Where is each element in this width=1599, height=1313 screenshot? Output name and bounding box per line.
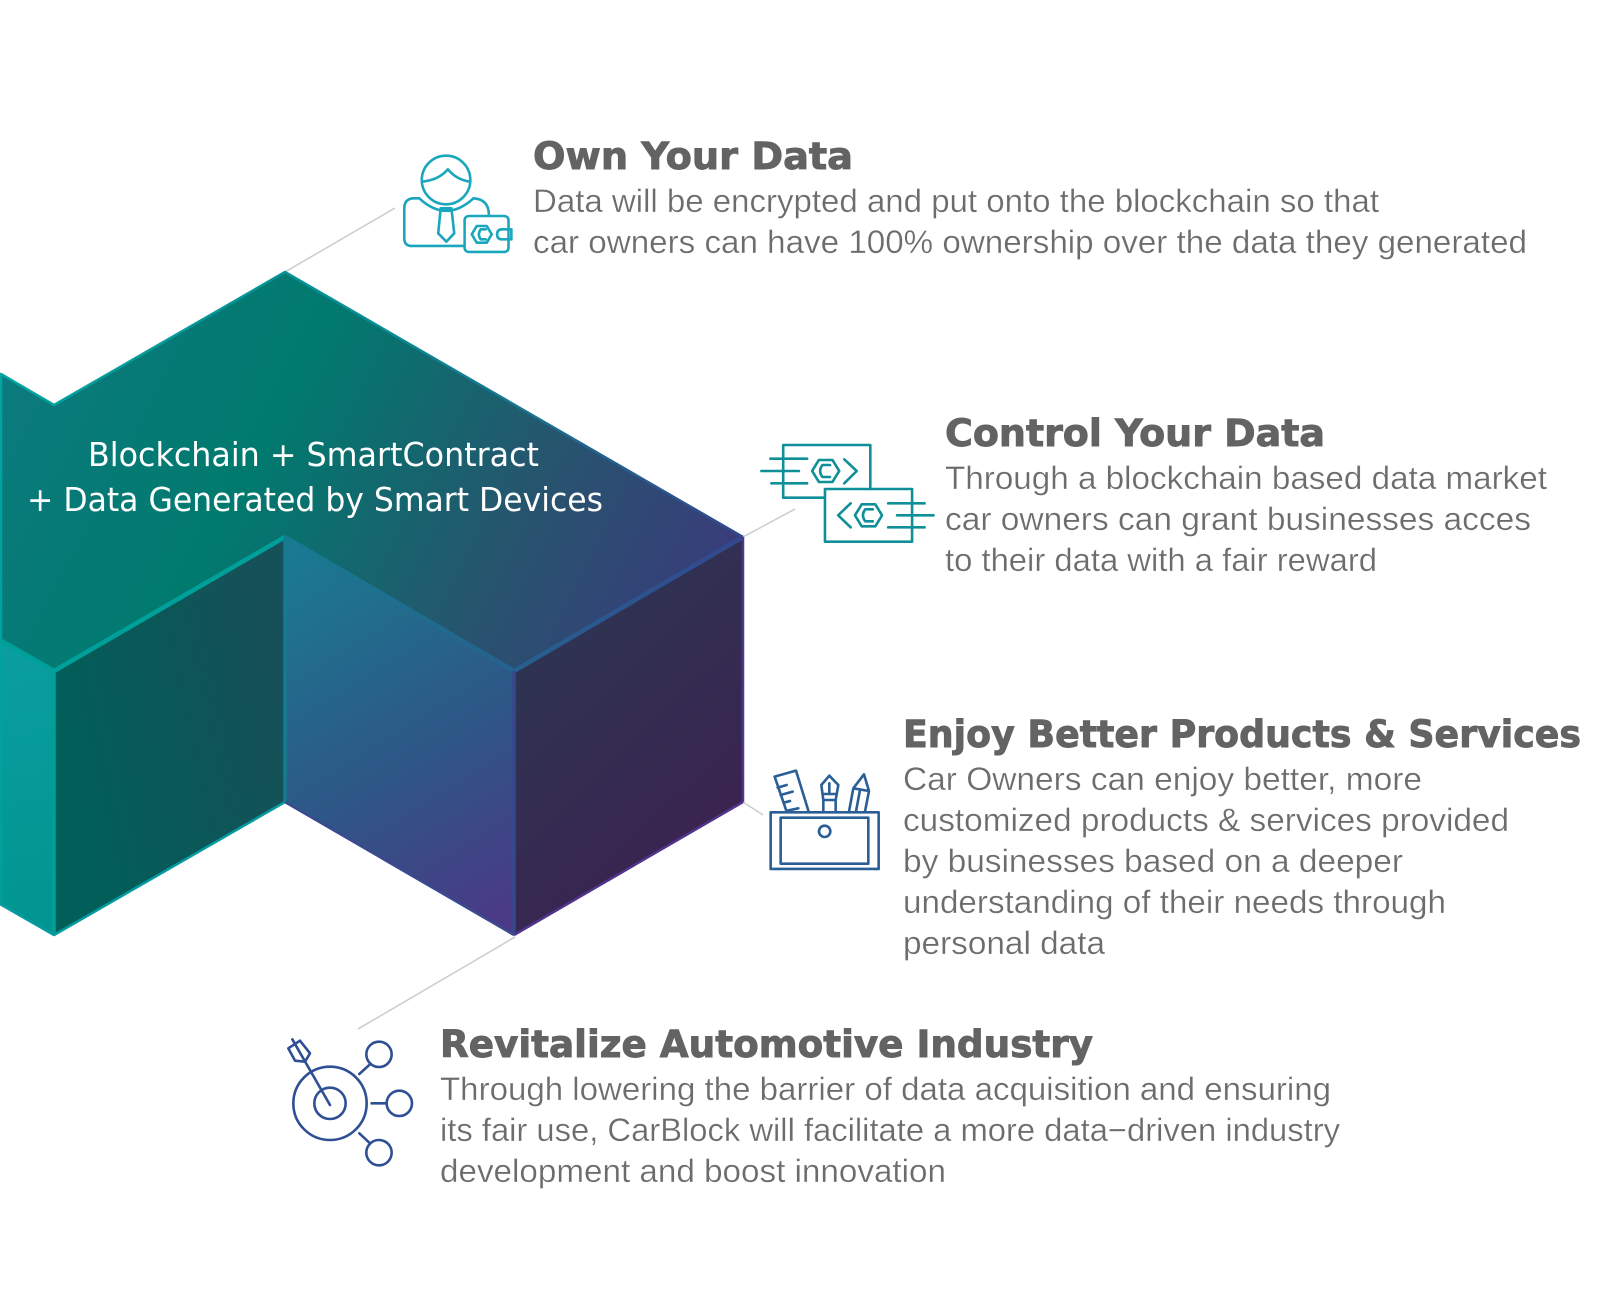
connector lines	[285, 208, 795, 1029]
text: enjoy better body: personal data	[903, 925, 1106, 961]
icon: tool box with ruler and pens	[771, 771, 879, 869]
text: own your data body: car owners can have 100% ownership over the data they generated	[533, 224, 1527, 260]
block caption: Blockchain + SmartContract	[88, 435, 539, 474]
text: enjoy better body: understanding of their needs through	[903, 884, 1446, 920]
isometric block	[0, 272, 743, 935]
panel: control your data	[761, 412, 1547, 578]
text: revitalize body	[440, 1071, 1341, 1189]
text: own your data body	[533, 183, 1527, 260]
icon: data exchange cards	[761, 445, 933, 542]
text: enjoy better body: by businesses based on a deeper	[903, 843, 1403, 879]
text: control your data body: car owners can grant businesses acces	[945, 501, 1531, 537]
heading: control your data: Control Your Data	[945, 412, 1325, 455]
icon: owner with wallet	[404, 156, 511, 252]
panel: revitalize automotive industry	[288, 1023, 1341, 1189]
text: revitalize body: development and boost innovation	[440, 1153, 946, 1189]
block caption: + Data Generated by Smart Devices	[27, 480, 603, 519]
text: control your data body: Through a blockchain based data market	[945, 460, 1547, 496]
text: control your data body: to their data with a fair reward	[945, 542, 1377, 578]
block top face	[0, 272, 743, 671]
block middle face	[285, 537, 514, 935]
heading: revitalize automotive industry: Revitalize Automotive Industry	[440, 1023, 1093, 1066]
icon: target with arrow and nodes	[288, 1039, 412, 1165]
text: enjoy better body: customized products & services provided	[903, 802, 1509, 838]
panel: enjoy better products and services	[771, 713, 1581, 961]
text: control your data body	[945, 460, 1547, 578]
text: revitalize body: Through lowering the barrier of data acquisition and ensuring	[440, 1071, 1331, 1107]
text: own your data body: Data will be encrypted and put onto the blockchain so that	[533, 183, 1379, 219]
text: enjoy better body	[903, 761, 1509, 961]
panel: own your data	[404, 135, 1527, 260]
heading: own your data: Own Your Data	[533, 135, 853, 178]
text: revitalize body: its fair use, CarBlock will facilitate a more data−driven industry	[440, 1112, 1341, 1148]
block dark inner face	[54, 537, 285, 935]
block left sliver face	[0, 640, 54, 935]
heading: enjoy better products and services: Enjoy Better Products & Services	[903, 713, 1581, 756]
block edges	[0, 272, 743, 935]
block right face	[514, 537, 743, 935]
text: enjoy better body: Car Owners can enjoy better, more	[903, 761, 1422, 797]
block caption	[27, 435, 603, 519]
